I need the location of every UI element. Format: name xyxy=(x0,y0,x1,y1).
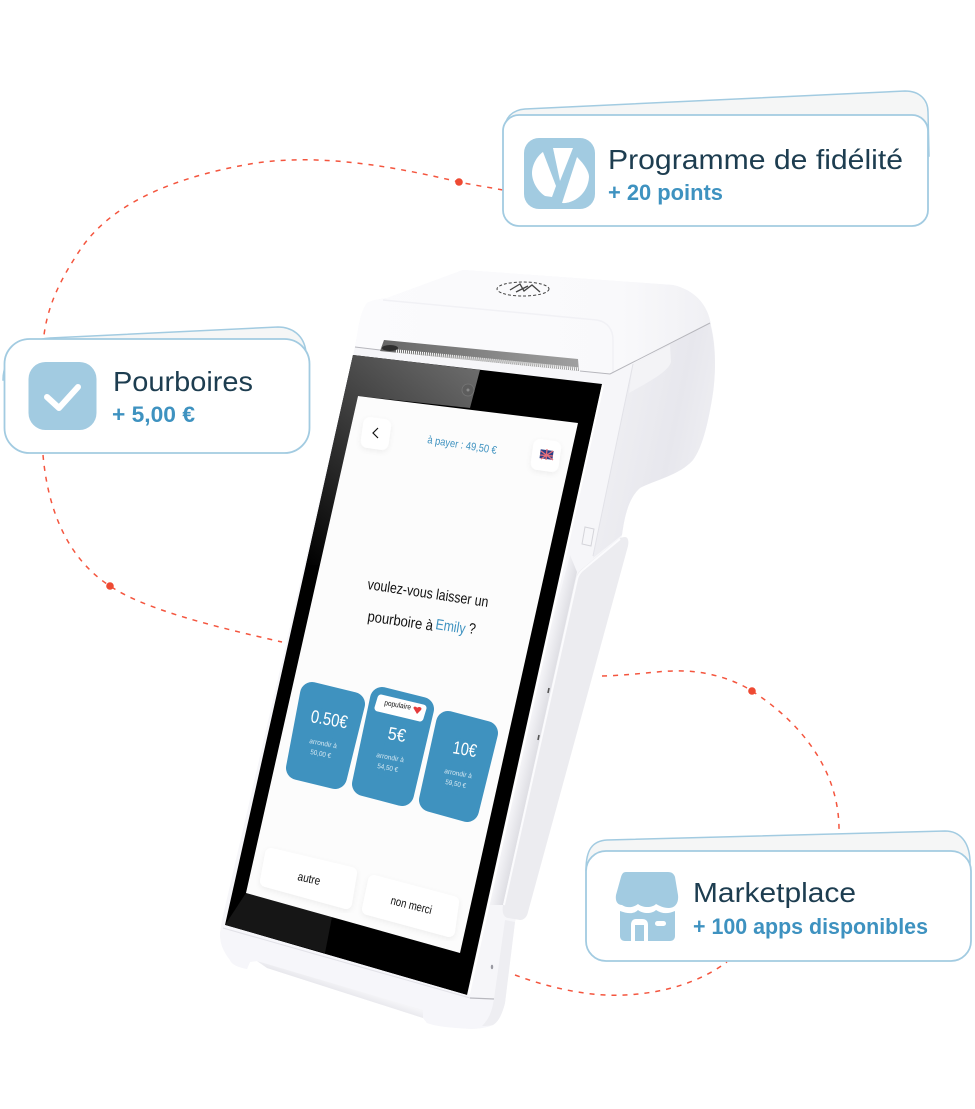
dotted connector: marketplace to terminal xyxy=(515,962,727,995)
side buttons xyxy=(538,688,549,740)
button: other: autre xyxy=(296,869,322,888)
printer roller xyxy=(382,345,398,351)
screen bezel xyxy=(225,355,602,995)
heading: Programme de fidélité xyxy=(608,144,903,175)
tip option 10: 59,50 € xyxy=(445,779,467,790)
dotted connector: tips to terminal xyxy=(43,455,282,642)
tip question: ? xyxy=(467,620,477,638)
bezel rim xyxy=(469,385,603,994)
tip question: Emily xyxy=(434,616,467,638)
chin seam xyxy=(223,928,470,998)
button: other xyxy=(266,854,351,903)
tip option 5: 54,50 € xyxy=(377,763,399,774)
back sheet xyxy=(505,91,929,156)
bezel glare top xyxy=(306,355,480,565)
strip seam xyxy=(593,364,633,556)
language button xyxy=(530,438,562,473)
tip option 0.50: 0.50€ xyxy=(309,706,349,732)
chin and foot xyxy=(220,925,505,1029)
bezel glare bottom xyxy=(225,893,332,953)
tip question: voulez-vous laisser un xyxy=(366,576,490,611)
value: + 5,00 € xyxy=(112,402,195,427)
card reader xyxy=(503,537,628,920)
tip option 10: arrondir à xyxy=(444,768,473,780)
tip option 5: 5€ xyxy=(386,723,408,746)
icon: shop xyxy=(616,872,678,941)
tip option 0.50: arrondir à xyxy=(309,738,338,750)
tip option 10 xyxy=(431,723,486,810)
button: no thanks: non merci xyxy=(389,893,433,917)
button: no thanks xyxy=(368,881,453,931)
tip question: pourboire à xyxy=(366,608,435,635)
roll notch xyxy=(629,345,671,393)
printer teeth xyxy=(396,351,578,369)
tip question xyxy=(366,576,490,638)
device body xyxy=(220,270,715,1029)
front sheet xyxy=(586,851,971,961)
status led xyxy=(491,965,493,969)
connector dots xyxy=(106,178,756,695)
front sheet xyxy=(4,339,310,453)
heading: Pourboires xyxy=(113,366,253,397)
front sheet xyxy=(503,115,928,226)
card: fidelity programme xyxy=(503,91,929,226)
value: + 20 points xyxy=(608,180,723,205)
tip option 10: 10€ xyxy=(451,737,478,761)
amount to pay: à payer : 49,50 € xyxy=(427,434,498,457)
card: marketplace xyxy=(586,831,971,961)
tip option 0.50 xyxy=(298,694,353,777)
camera xyxy=(462,384,474,396)
printer hood xyxy=(355,270,711,374)
hood seam xyxy=(355,323,710,374)
dotted connector: fidelity to tips xyxy=(44,160,503,335)
card: tips xyxy=(3,327,310,453)
corner side xyxy=(482,920,515,1026)
back sheet xyxy=(3,327,306,380)
value: + 100 apps disponibles xyxy=(693,914,928,939)
shaded strip beside reader xyxy=(478,555,577,905)
paper roll side xyxy=(593,323,715,558)
tip option 5: arrondir à xyxy=(376,752,405,764)
USB port xyxy=(582,527,594,546)
popular badge: populaire xyxy=(384,698,412,712)
icon: check xyxy=(28,362,96,430)
icon: loyalty logo xyxy=(524,138,595,209)
hood ridge xyxy=(383,300,613,372)
reader rim xyxy=(504,539,620,905)
printer slot xyxy=(380,340,579,371)
payment terminal xyxy=(220,270,715,1029)
tip option 0.50: 50,00 € xyxy=(310,749,332,760)
tip option 5 xyxy=(364,698,423,794)
heading: Marketplace xyxy=(693,877,856,908)
screen xyxy=(246,396,578,953)
back button xyxy=(360,416,392,451)
dotted connector: terminal to marketplace xyxy=(602,671,839,832)
NFC logo xyxy=(497,282,549,296)
corner seam xyxy=(470,998,494,999)
back sheet xyxy=(586,831,970,880)
foot recess xyxy=(257,961,423,1018)
